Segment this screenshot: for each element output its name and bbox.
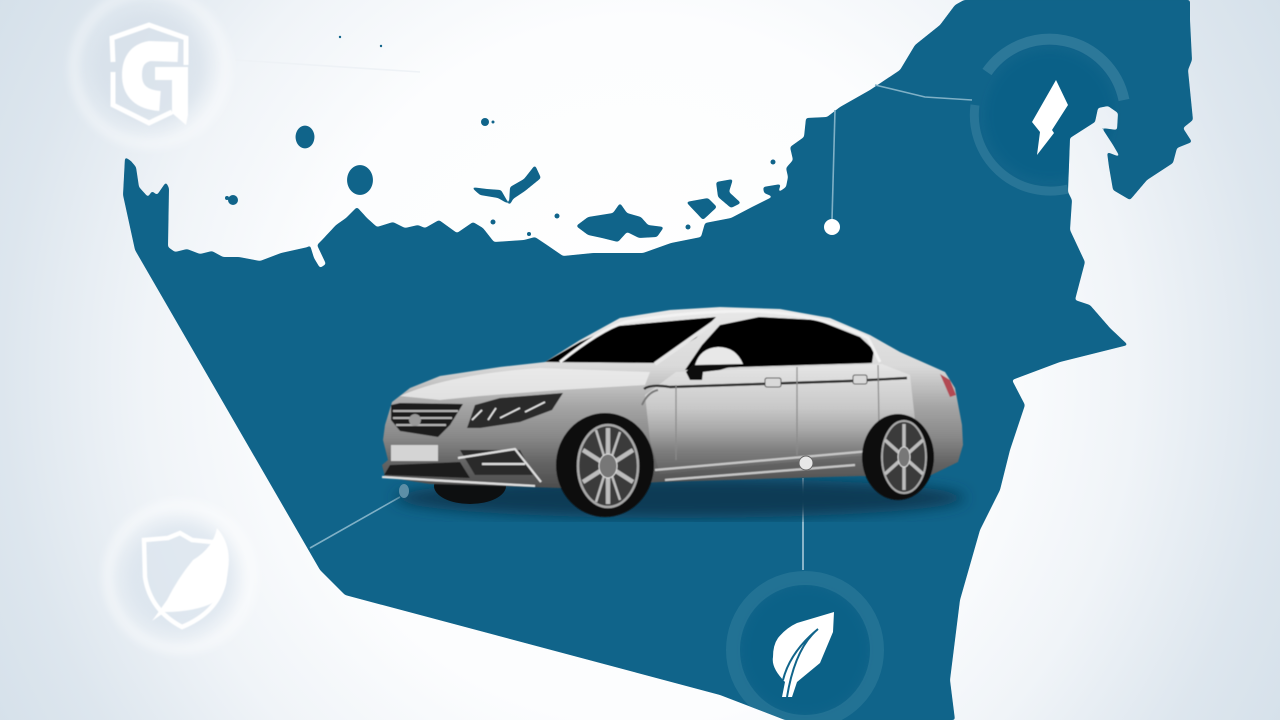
icon: shield: [144, 533, 224, 627]
grille: [391, 403, 463, 437]
hood highlight: [400, 368, 650, 400]
icon ring: leaf: [733, 578, 877, 720]
icon: lightning bolt: [1032, 80, 1068, 155]
windshield: [545, 317, 716, 363]
number plate: [391, 445, 438, 461]
car shadow: [395, 478, 965, 518]
tail light: [940, 374, 956, 397]
rear wheel: [862, 414, 934, 500]
car details: [382, 307, 963, 517]
small islets: [225, 36, 776, 236]
marker dot: [824, 219, 840, 235]
a pillar: [655, 318, 720, 364]
doors panel: [645, 364, 915, 474]
icon: G shield: [112, 25, 188, 125]
roof trim: [560, 311, 880, 362]
headlight: [467, 393, 563, 428]
far front wheel: [434, 468, 506, 504]
icon ring: lightning bolt: [974, 39, 1124, 191]
side windows: [685, 317, 874, 370]
mirror: [686, 347, 743, 380]
belt line: [644, 378, 907, 389]
connector lines: [235, 60, 972, 570]
car: [382, 307, 965, 518]
icon ring: G badge: [74, 0, 226, 144]
door handles: [765, 378, 781, 387]
front wheel: [556, 413, 654, 517]
side sill: [655, 451, 870, 480]
icon: feather: [152, 528, 229, 621]
icon: leaf: [773, 612, 834, 697]
lower bumper: [382, 449, 541, 486]
car marker pins: [799, 456, 813, 470]
car body: [382, 307, 963, 488]
icon ring: shield and feather: [108, 505, 252, 649]
